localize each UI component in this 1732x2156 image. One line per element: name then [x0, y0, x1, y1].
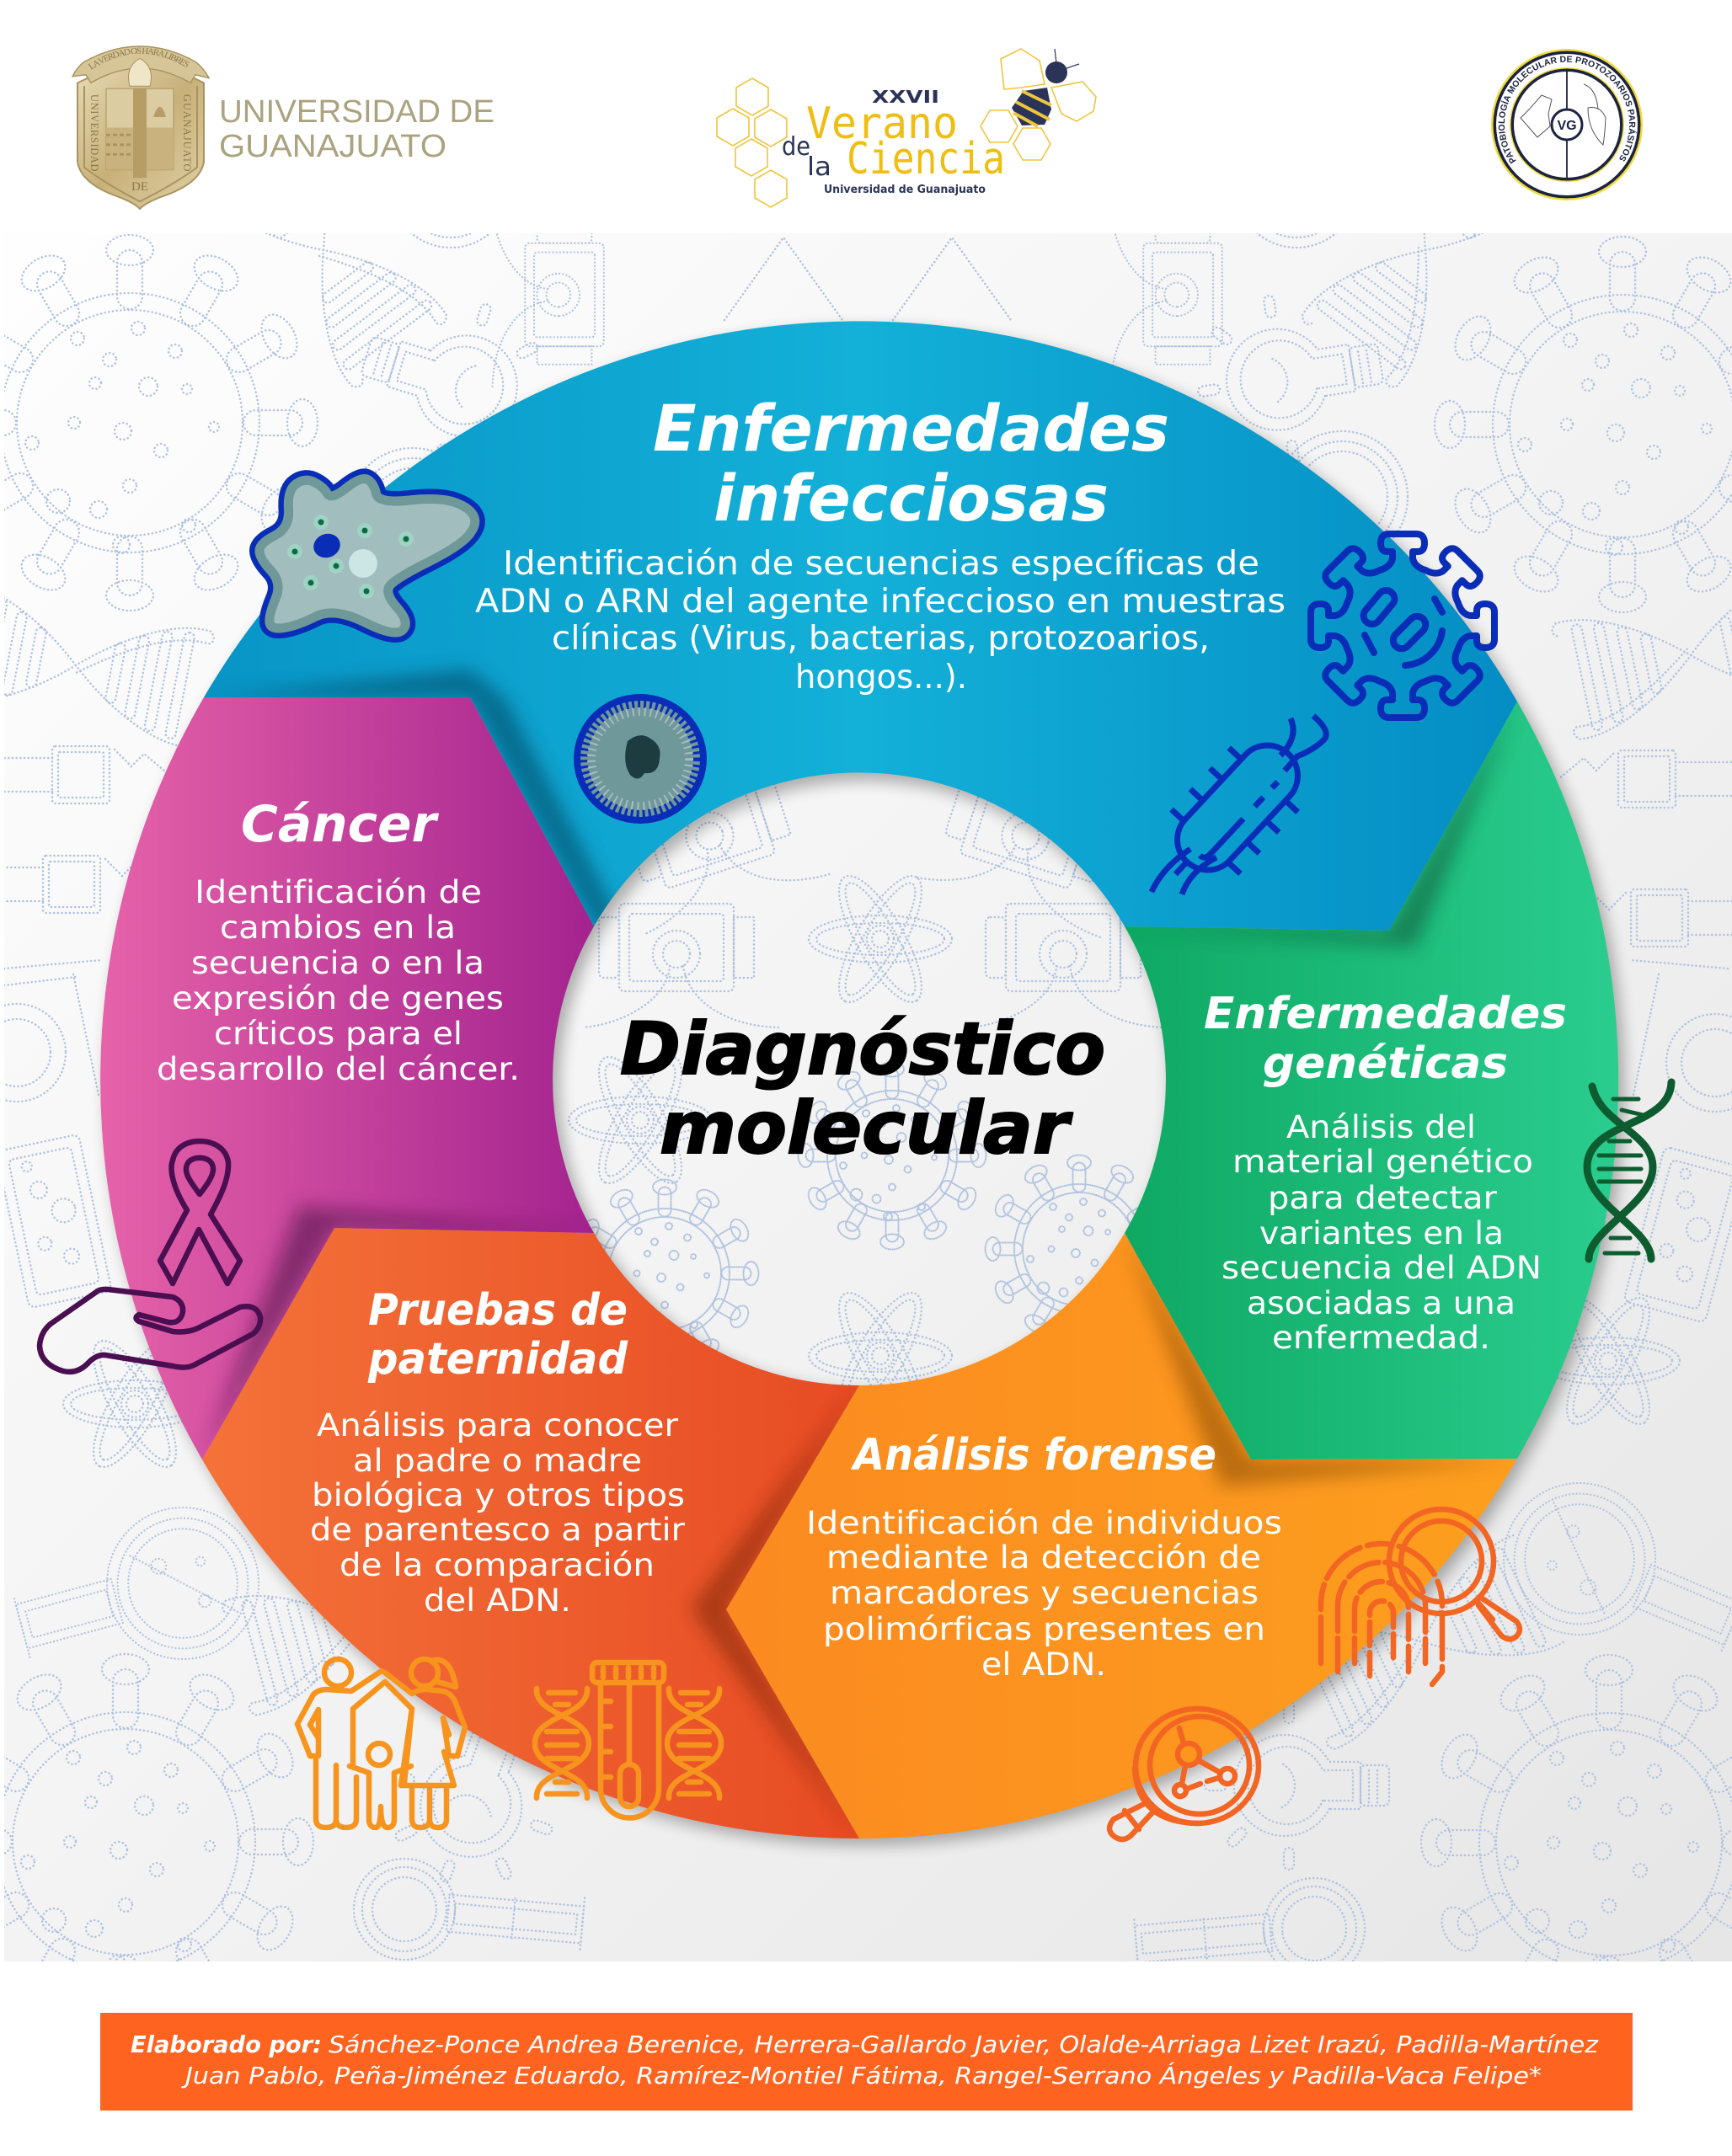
text block: desarrollo del cáncer. — [157, 1051, 520, 1087]
panel: Cáncer — [100, 697, 594, 1460]
authors line 1: Elaborado por: — [131, 2031, 322, 2058]
header logo: Universidad de Guanajuato — [71, 45, 494, 211]
text block: polimórficas presentes en — [823, 1611, 1265, 1647]
header logo: Verano de la Ciencia — [717, 49, 1096, 207]
heading: Análisis forense — [850, 1430, 1216, 1481]
logo text: Ciencia — [847, 134, 1005, 184]
heading: paternidad — [367, 1334, 628, 1385]
title: Diagnóstico molecular: Diagnóstico — [620, 1007, 1105, 1091]
header logo: Patobiología Molecular de Protozoarios Parásitos: VG — [1557, 119, 1577, 133]
text block: secuencia del ADN — [1221, 1250, 1542, 1286]
icon: spiky cell — [574, 694, 707, 824]
text block: secuencia o en la — [191, 945, 484, 981]
icon: university crest: GUANAJUATO — [181, 94, 193, 172]
panel: Pruebas de paternidad — [202, 1228, 859, 1838]
icon: honeycomb — [717, 49, 1096, 207]
panel: Enfermedades genéticas — [1125, 699, 1618, 1460]
text block: de parentesco a partir — [310, 1512, 686, 1548]
panel: Análisis forense — [726, 1233, 1517, 1838]
icon: fingerprint with magnifier — [1321, 1509, 1520, 1684]
text block: hongos...). — [795, 659, 967, 696]
icon: university crest — [71, 45, 211, 211]
icon: test tube with DNA — [535, 1662, 721, 1817]
text block: Análisis para conocer — [317, 1407, 679, 1444]
text block: material genético — [1232, 1144, 1533, 1180]
logo text: XXVII — [872, 87, 939, 107]
logo text: Verano — [806, 99, 958, 149]
text block: marcadores y secuencias — [830, 1575, 1259, 1611]
text block: el ADN. — [981, 1646, 1106, 1683]
heading: Pruebas de — [368, 1285, 628, 1336]
authors line 1: Sánchez-Ponce Andrea Berenice, Herrera-Gallardo Javier, Olalde-Arriaga Lizet Irazú, Padilla-Martínez — [329, 2031, 1599, 2058]
chart: diagnostic ring of five segments — [100, 321, 1624, 1845]
panel: Enfermedades infecciosas — [204, 321, 1517, 935]
heading: Cáncer — [241, 795, 439, 854]
logo text: la — [807, 152, 831, 182]
text block: expresión de genes — [172, 980, 504, 1017]
text block: ADN o ARN del agente infeccioso en muestras — [475, 583, 1286, 621]
text block: al padre o madre — [353, 1443, 642, 1479]
authors line 2: Juan Pablo, Peña-Jiménez Eduardo, Ramírez-Montiel Fátima, Rangel-Serrano Ángeles y Padilla-Vaca Felipe* — [181, 2061, 1542, 2089]
text block: Identificación de individuos — [806, 1505, 1282, 1541]
icon: amoeba — [259, 478, 475, 632]
heading: Enfermedades — [653, 391, 1169, 466]
logo text: de — [782, 132, 810, 162]
panel: patterned background — [4, 233, 1732, 1961]
text block: del ADN. — [424, 1582, 571, 1619]
header logo: Patobiología Molecular de Protozoarios Parásitos: PATOBIOLOGÍA MOLECULAR DE PROTOZOARIOS PARÁSITOS — [1498, 56, 1637, 163]
text block: enfermedad. — [1272, 1320, 1490, 1356]
icon: virus — [1311, 534, 1494, 718]
text block: críticos para el — [214, 1016, 462, 1052]
icon: open hand — [40, 1289, 260, 1372]
icon: bee — [1012, 49, 1079, 126]
logo text — [782, 87, 1005, 196]
callout: authorship footer — [100, 2013, 1633, 2111]
text block: mediante la detección de — [826, 1540, 1261, 1576]
text block: Identificación de — [195, 874, 482, 910]
text block: Identificación de secuencias específicas de — [503, 545, 1259, 583]
heading: infecciosas — [714, 461, 1109, 536]
text block: para detectar — [1268, 1180, 1498, 1216]
text block: variantes en la — [1259, 1215, 1504, 1251]
text block: asociadas a una — [1247, 1285, 1516, 1321]
icon: university crest: DE — [131, 180, 148, 194]
heading: Enfermedades — [1204, 989, 1567, 1039]
icon: magnifier with molecule — [1109, 1709, 1259, 1839]
icon: awareness ribbon — [160, 1141, 240, 1283]
text block: de la comparación — [339, 1547, 655, 1583]
icon: family — [297, 1659, 465, 1828]
text block: biológica y otros tipos — [312, 1477, 685, 1513]
logo text: Universidad de Guanajuato — [824, 184, 986, 196]
text block: clínicas (Virus, bacterias, protozoarios, — [552, 620, 1210, 658]
icon: university crest: UNIVERSIDAD — [88, 94, 100, 172]
text block: cambios en la — [220, 910, 456, 946]
header logo: Patobiología Molecular de Protozoarios Parásitos — [1491, 49, 1643, 200]
text block: Análisis del — [1286, 1109, 1476, 1145]
title: Diagnóstico molecular: molecular — [660, 1086, 1073, 1171]
logo text: UNIVERSIDAD DE — [219, 94, 494, 130]
icon: university crest: LA VERDAD OS HARA LIBRES — [88, 47, 190, 70]
heading: genéticas — [1263, 1038, 1508, 1089]
icon: DNA helix — [1587, 1082, 1671, 1259]
logo text: GUANAJUATO — [219, 129, 446, 164]
icon: bacterium — [1141, 716, 1326, 906]
